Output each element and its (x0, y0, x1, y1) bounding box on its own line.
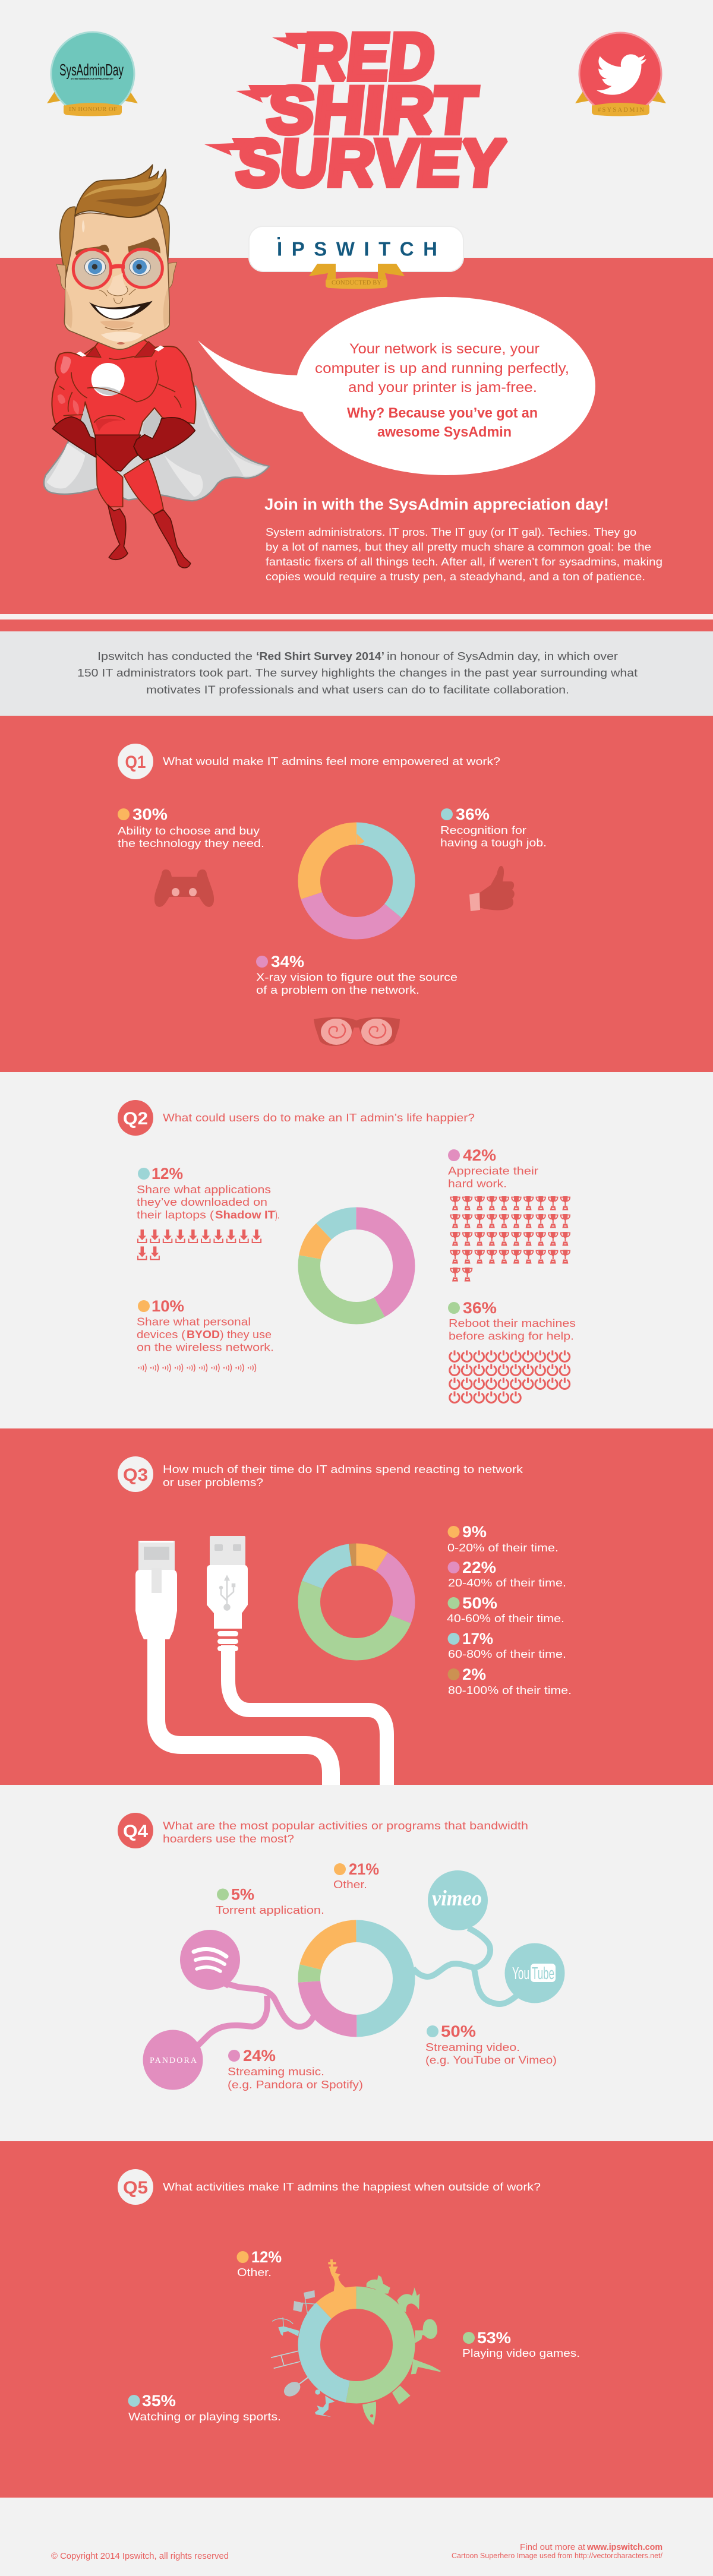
panel: survey intro: in honour of SysAdmin day, in which over (387, 650, 618, 662)
hair sides (60, 204, 169, 273)
legend Q3: 0-20% of their time. (447, 1542, 559, 1554)
badge: SysAdminDay in honour of (47, 32, 138, 116)
question text Q4: hoarders use the most? (163, 1832, 294, 1845)
panel: survey intro: Ipswitch has conducted the (97, 650, 253, 662)
stat: 30% (118, 805, 264, 849)
legend Q3: 2% (462, 1665, 486, 1683)
question badge Q5 (118, 2169, 153, 2205)
question text Q4 (163, 1819, 528, 1845)
donut chart Q1 (309, 833, 404, 928)
stat: 50%: 50% (441, 2022, 476, 2040)
title: Red Shirt Survey: SHIRT (264, 73, 480, 147)
title: Red Shirt Survey: RED (298, 20, 438, 93)
heading: join in: Join in with the SysAdmin appreciation day! (264, 495, 609, 513)
stat: 12%: their laptops ( (137, 1209, 214, 1221)
panel: Q4 (0, 1785, 713, 2141)
badge: SysAdminDay in honour of: SysAdminDay (59, 61, 124, 79)
footer: © Copyright 2014 Ipswitch, all rights reserved (51, 2552, 229, 2561)
icon: youtube: Tube (532, 1964, 554, 1983)
stat: 53% (462, 2329, 580, 2359)
text block: about sysadmins: by a lot of names, but they all pretty much share a common goal: be the (266, 541, 651, 553)
logo: Ipswitch conducted by (249, 226, 463, 289)
stat: 24%: Streaming music. (228, 2066, 324, 2078)
stat: 34%: X-ray vision to figure out the source (256, 972, 458, 984)
badge: SysAdminDay in honour of: IN HONOUR OF (69, 106, 117, 113)
trunks (95, 435, 141, 471)
question badge Q2: Q2 (123, 1109, 148, 1129)
question badge Q3 (118, 1456, 153, 1492)
collar (86, 342, 156, 358)
question badge Q4: Q4 (123, 1822, 148, 1841)
panel: Q1 (0, 716, 713, 1072)
stat: 42%: hard work. (448, 1178, 507, 1190)
question text Q3: How much of their time do IT admins spend reacting to network (163, 1463, 523, 1475)
lenses and eyes (73, 249, 111, 288)
icons: 12 downloads (138, 1229, 261, 1259)
stat: 12%: they’ve downloaded on (137, 1196, 267, 1208)
text block: about sysadmins: fantastic fixers of all things tech. After all, if weren’t for sysadmins, making (266, 556, 662, 568)
stat: 36%: having a tough job. (440, 837, 547, 849)
stat: 30%: 30% (132, 805, 168, 823)
stat: 42%: Appreciate their (448, 1165, 538, 1177)
question text Q4: What are the most popular activities or programs that bandwidth (163, 1819, 528, 1832)
panel: survey intro: ‘Red Shirt Survey 2014’ (256, 650, 384, 662)
atv rider (367, 2275, 390, 2294)
goal posts (271, 2351, 300, 2368)
stat: 50%: (e.g. YouTube or Vimeo) (425, 2054, 557, 2066)
icon: spotify (180, 1930, 240, 1990)
badge: SysAdminDay in honour of: SYSTEM ADMINISTRATOR APPRECIATION DAY (71, 77, 113, 80)
donut chart Q5 (309, 2297, 404, 2392)
speech bubble: computer is up and running perfectly, (315, 361, 569, 377)
stat: 5%: 5% (231, 1885, 254, 1903)
stat: 24% (228, 2047, 363, 2091)
stat: 34% (256, 953, 458, 996)
superhero head (56, 165, 176, 349)
stat: 53%: 53% (477, 2329, 511, 2347)
legend Q3: 22% (462, 1559, 496, 1576)
ears (56, 263, 176, 290)
stat: 10%: ) they use (220, 1329, 272, 1341)
muscle lines (59, 356, 181, 423)
panel: hero header (0, 20, 713, 631)
panel: Q2 (0, 1072, 713, 1428)
gloves (52, 417, 96, 457)
legend Q3: 20-40% of their time. (448, 1577, 566, 1589)
icons: 42 trophies (450, 1196, 570, 1282)
icon: game controller (154, 870, 214, 907)
stat: 10% (137, 1297, 274, 1353)
panel: survey intro: motivates IT professionals and what users can do to facilitate collaboration. (146, 683, 569, 696)
legend Q3: 17% (462, 1630, 493, 1648)
donut chart Q4 (309, 1931, 404, 2026)
chess king (328, 2259, 346, 2291)
connectors: video (413, 1928, 518, 2004)
stat: 10%: on the wireless network. (137, 1341, 274, 1353)
stat: 36%: 36% (463, 1299, 497, 1317)
icons: 10 wireless (138, 1364, 255, 1372)
stat: 35%: 35% (142, 2392, 176, 2410)
legend Q3: 60-80% of their time. (448, 1648, 566, 1660)
rifle (411, 2359, 441, 2374)
icon: youtube (505, 1943, 564, 2003)
connectors: music (197, 1984, 314, 2046)
question badge Q1: Q1 (125, 753, 146, 772)
stat: 42%: 42% (463, 1146, 496, 1164)
icon: vimeo (428, 1870, 488, 1930)
hair top (75, 165, 166, 217)
speech bubble: Why? Because you’ve got an (347, 405, 538, 421)
stat: 21%: 21% (349, 1860, 379, 1878)
legend Q3 (447, 1523, 572, 1696)
logo: Ipswitch conducted by: IPSWITCH (277, 238, 437, 260)
stat: 5%: Torrent application. (216, 1904, 324, 1916)
stat: 50% (425, 2022, 557, 2066)
glasses (73, 249, 111, 288)
cape inner below arms (81, 405, 94, 437)
stat: 42% (448, 1146, 538, 1190)
stat: 36%: Reboot their machines (449, 1317, 576, 1329)
badge: twitter sysadmin hashtag (575, 33, 666, 116)
legs (96, 453, 123, 507)
stat: 12%: Shadow IT (215, 1209, 275, 1221)
stat: 35%: Watching or playing sports. (128, 2411, 281, 2423)
stat: 30%: Ability to choose and buy (118, 825, 260, 837)
illustration: USB cable (207, 1536, 387, 1785)
stat: 21% (333, 1860, 379, 1891)
icon: pandora (143, 2030, 203, 2090)
stat: 10%: 10% (152, 1297, 184, 1315)
dragon (397, 2287, 420, 2312)
panel: survey intro (0, 631, 713, 716)
speech bubble: and your printer is jam-free. (348, 380, 537, 396)
icon: vimeo: vimeo (432, 1886, 482, 1911)
legend Q3: 9% (462, 1523, 487, 1541)
badge: twitter sysadmin hashtag: #SYSADMIN (598, 107, 644, 113)
speech bubble: Your network is secure, your (349, 341, 540, 357)
question badge Q1 (118, 744, 153, 779)
stat: 12% (236, 2248, 282, 2278)
footer: Cartoon Superhero Image used from http://vectorcharacters.net/ (452, 2551, 662, 2560)
question badge Q4 (118, 1813, 153, 1848)
stat: 35% (128, 2392, 281, 2423)
icon: usb symbol (220, 1576, 235, 1610)
mouth (89, 301, 153, 320)
stat: 24%: 24% (243, 2047, 276, 2065)
stat: 36% (440, 805, 547, 849)
icons: 36 power buttons (450, 1351, 570, 1402)
cannon (392, 2386, 411, 2404)
question badge Q2 (118, 1100, 153, 1136)
legend Q3: 40-60% of their time. (447, 1613, 564, 1624)
stat: 36%: before asking for help. (449, 1330, 574, 1342)
panel: Q5 (0, 2141, 713, 2498)
face (64, 208, 169, 349)
mushroom tree (415, 2319, 437, 2343)
icon: thumbs up (469, 866, 515, 911)
question badge Q5: Q5 (123, 2178, 148, 2198)
footer: Find out more at (520, 2543, 585, 2552)
crossbow archer (272, 2318, 293, 2327)
stat: 30%: the technology they need. (118, 837, 264, 849)
panel: Q3 (0, 1428, 713, 1785)
checkered flags (293, 2290, 315, 2312)
stat: 34%: of a problem on the network. (256, 984, 419, 996)
nose (107, 273, 128, 296)
icon: twitter bird (597, 54, 646, 95)
silhouettes around donut (271, 2259, 441, 2425)
stat: 12%: Other. (237, 2267, 272, 2278)
text block: about sysadmins: System administrators. IT pros. The IT guy (or IT gal). Techies. They go (266, 526, 636, 538)
speech bubble (198, 297, 595, 475)
title: Red Shirt Survey: SURVEY (233, 126, 509, 200)
superhero body (44, 339, 269, 568)
stat: 12%: ). (275, 1209, 279, 1221)
question text Q3 (163, 1463, 523, 1488)
eyebrows (75, 238, 160, 255)
question text Q5: What activities make IT admins the happiest when outside of work? (163, 2180, 541, 2193)
stat: 12%: 12% (152, 1165, 183, 1183)
panel: survey intro: 150 IT administrators took part. The survey highlights the changes in the past year surrounding what (77, 666, 638, 679)
donut chart Q3 (309, 1554, 404, 1649)
footballer (315, 2389, 320, 2395)
donut chart Q2 (309, 1218, 404, 1313)
cape (44, 386, 269, 501)
icon: youtube: You (512, 1964, 529, 1983)
illustration: ethernet cable (135, 1541, 331, 1785)
torso (52, 339, 196, 435)
footer: www.ipswitch.com (586, 2543, 662, 2552)
text block: about sysadmins: copies would require a trusty pen, a steadyhand, and a ton of patience. (266, 571, 645, 583)
speech bubble: awesome SysAdmin (377, 424, 512, 440)
stat: 36%: 36% (456, 805, 490, 823)
title: Red Shirt Survey (204, 20, 509, 200)
stat: 10%: Share what personal (137, 1316, 251, 1328)
boots (108, 505, 128, 560)
icon: x-ray glasses (314, 1017, 400, 1046)
question text Q1: What would make IT admins feel more empowered at work? (163, 755, 500, 767)
stat: 36% (448, 1299, 576, 1342)
footer (51, 2543, 662, 2561)
legend Q3: 50% (462, 1594, 497, 1612)
stat: 12%: 12% (251, 2248, 282, 2266)
question badge Q3: Q3 (123, 1465, 148, 1485)
question text Q3: or user problems? (163, 1476, 263, 1488)
stat: 50%: Streaming video. (425, 2041, 520, 2053)
stat: 21%: Other. (333, 1879, 367, 1891)
question text Q2: What could users do to make an IT admin’s life happier? (163, 1111, 475, 1124)
stat: 5% (216, 1885, 324, 1916)
text block: about sysadmins (266, 526, 662, 583)
legend Q3: 80-100% of their time. (448, 1684, 572, 1696)
icon: pandora: PANDORA (150, 2056, 197, 2065)
rocket (362, 2401, 376, 2425)
stat: 10%: BYOD (187, 1329, 220, 1341)
stat: 10%: devices ( (137, 1329, 185, 1341)
tennis racket (281, 2379, 303, 2400)
stat: 53%: Playing video games. (462, 2347, 580, 2359)
stat: 34%: 34% (271, 953, 304, 971)
logo: Ipswitch conducted by: CONDUCTED BY (332, 280, 381, 286)
stat: 24%: (e.g. Pandora or Spotify) (228, 2079, 363, 2091)
stat: 12%: Share what applications (137, 1184, 271, 1196)
chest emblem (92, 363, 125, 396)
stat: 12% (137, 1165, 279, 1221)
stat: 36%: Recognition for (440, 824, 526, 836)
